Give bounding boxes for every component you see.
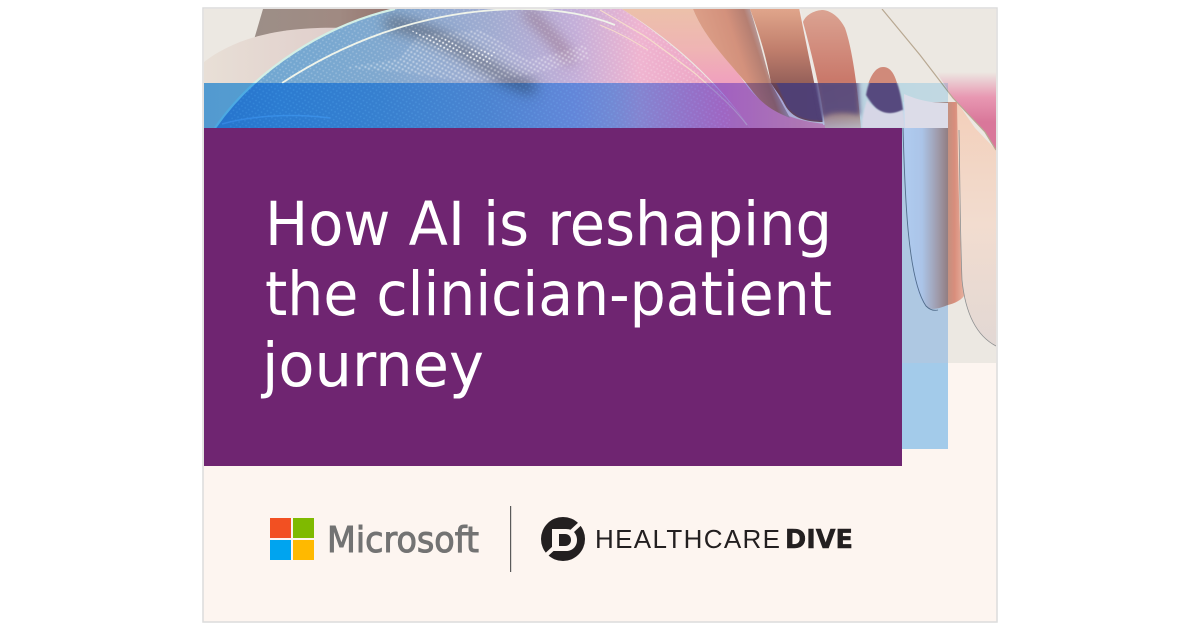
rounded fold E top above band <box>868 67 897 83</box>
beige curved shape <box>204 28 337 128</box>
blue to pink dotted sphere <box>215 9 750 129</box>
rounded fold D <box>803 10 861 128</box>
icon: Healthcare Dive mark <box>541 517 585 561</box>
card background <box>203 8 997 622</box>
title: How AI is reshaping <box>265 189 832 260</box>
light blue strip beside panel <box>902 128 948 449</box>
translucent blue overlay band <box>204 83 948 128</box>
Microsoft wordmark: Microsoft <box>327 520 479 561</box>
diagonal line <box>882 9 996 150</box>
shade on fold C <box>775 80 823 121</box>
shade on fold D <box>815 80 860 118</box>
peach to pink fold A <box>622 9 826 128</box>
Healthcare Dive wordmark: HEALTHCARE <box>595 524 780 554</box>
brown fold B <box>693 9 790 118</box>
taupe fold at top <box>254 9 390 38</box>
pale lilac fold top <box>904 94 948 128</box>
pink corner <box>938 74 996 149</box>
purple title panel <box>204 128 902 466</box>
icon: Microsoft squares <box>270 518 314 560</box>
Healthcare Dive logo: DIVE <box>785 525 853 555</box>
title: the clinician-patient <box>265 259 832 330</box>
hero image: abstract folds <box>204 9 996 363</box>
title <box>260 189 832 401</box>
brown fold C <box>750 9 823 122</box>
Microsoft logo <box>270 518 479 561</box>
title: journey <box>260 330 484 401</box>
pale fold under E <box>862 100 905 128</box>
thin cream fold edges <box>600 10 747 125</box>
dark fold shading within band <box>776 83 948 128</box>
Healthcare Dive logo <box>541 517 853 561</box>
rounded fold E with shade <box>865 83 904 114</box>
right panel fold <box>957 102 996 346</box>
long grey-blue fold <box>903 102 966 309</box>
logo divider <box>510 506 511 572</box>
